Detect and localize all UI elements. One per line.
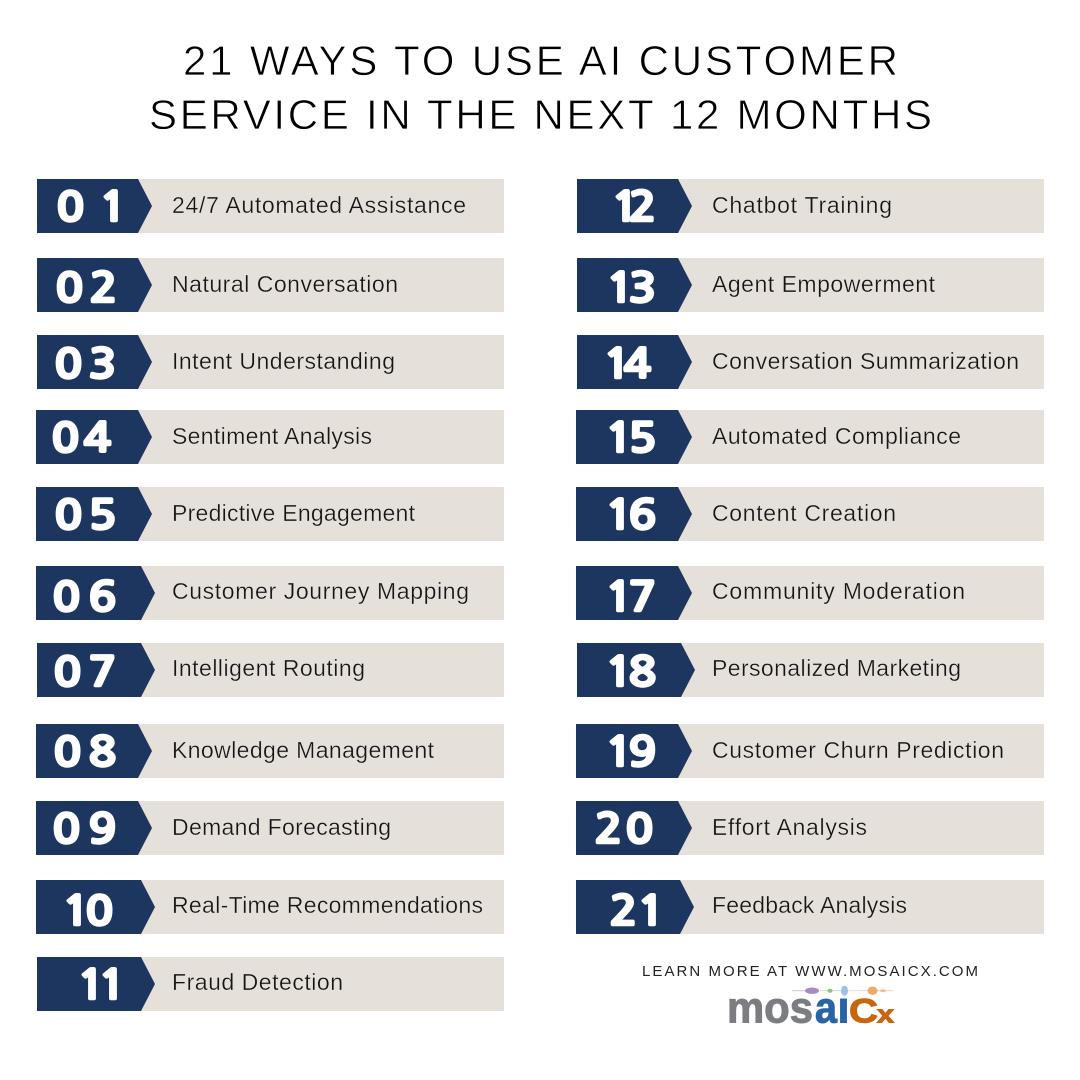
item 11: Fraud Detection xyxy=(172,969,343,995)
item 19: Customer Churn Prediction xyxy=(712,737,1004,763)
item 05: 05 xyxy=(54,497,116,535)
item 01: 01 xyxy=(56,189,127,227)
item 03 xyxy=(37,335,504,389)
item 13 xyxy=(577,258,1044,312)
item 15 xyxy=(576,410,1044,464)
item 11: 11 xyxy=(77,967,126,1005)
item 07: 07 xyxy=(54,654,116,692)
item 21 xyxy=(576,880,1044,934)
item 15: 15 xyxy=(605,420,656,458)
item 12 xyxy=(577,179,1044,233)
item 17: 17 xyxy=(605,579,656,617)
item 14: 14 xyxy=(603,346,651,384)
title: SERVICE IN THE NEXT 12 MONTHS xyxy=(149,91,932,138)
item 09 xyxy=(36,801,504,855)
logo wordmark: C xyxy=(849,992,878,1030)
item 14 xyxy=(577,335,1044,389)
item 18 xyxy=(577,643,1044,697)
icon: sound wave xyxy=(792,986,893,996)
logo: mosaicx xyxy=(727,984,895,1032)
item 08 xyxy=(36,724,504,778)
item 03: 03 xyxy=(54,346,116,384)
item 10 xyxy=(36,880,504,934)
item 05 xyxy=(36,487,504,541)
item 15: Automated Compliance xyxy=(712,423,961,449)
item 12: Chatbot Training xyxy=(712,192,892,218)
item 16: 16 xyxy=(605,497,656,535)
item 08: Knowledge Management xyxy=(172,737,435,763)
item 04 xyxy=(36,410,504,464)
item 21: Feedback Analysis xyxy=(712,892,907,918)
item 06: Customer Journey Mapping xyxy=(172,578,469,604)
call to action: LEARN MORE AT WWW.MOSAICX.COM xyxy=(642,963,978,980)
item 07 xyxy=(37,643,504,697)
item 17 xyxy=(576,566,1044,620)
item 02: Natural Conversation xyxy=(172,271,398,297)
item 20 xyxy=(576,801,1044,855)
item 01 xyxy=(37,179,504,233)
item 11 xyxy=(37,957,504,1011)
item 12: 12 xyxy=(611,189,656,227)
item 19 xyxy=(576,724,1044,778)
item 02: 02 xyxy=(56,270,117,308)
item 04: Sentiment Analysis xyxy=(172,423,372,449)
item 08: 08 xyxy=(54,734,116,772)
item 10: 10 xyxy=(62,893,113,931)
item 19: 19 xyxy=(605,734,656,772)
item 07: Intelligent Routing xyxy=(172,655,365,681)
item 10: Real-Time Recommendations xyxy=(172,892,483,918)
logo wordmark: I xyxy=(838,992,849,1030)
item 13: 13 xyxy=(606,270,656,308)
item 06: 06 xyxy=(52,579,116,617)
item 21: 21 xyxy=(610,893,665,931)
logo wordmark: x xyxy=(877,1002,895,1028)
item 02 xyxy=(37,258,504,312)
item 09: 09 xyxy=(52,811,116,849)
item 20: Effort Analysis xyxy=(712,814,867,840)
logo wordmark: a xyxy=(815,984,837,1032)
item 18: Personalized Marketing xyxy=(712,655,961,681)
item 16 xyxy=(576,487,1044,541)
item 18: 18 xyxy=(605,654,656,692)
title: 21 WAYS TO USE AI CUSTOMER xyxy=(183,37,898,84)
logo wordmark: mos xyxy=(727,984,813,1032)
item 17: Community Moderation xyxy=(712,578,965,604)
item 09: Demand Forecasting xyxy=(172,814,391,840)
title xyxy=(149,37,932,138)
logo wordmark xyxy=(727,984,895,1032)
item 20: 20 xyxy=(594,811,653,849)
item 06 xyxy=(36,566,504,620)
item 05: Predictive Engagement xyxy=(172,500,416,526)
item 01: 24/7 Automated Assistance xyxy=(172,192,466,218)
item 13: Agent Empowerment xyxy=(712,271,936,297)
item 14: Conversation Summarization xyxy=(712,348,1019,374)
item 16: Content Creation xyxy=(712,500,896,526)
item 03: Intent Understanding xyxy=(172,348,395,374)
item 04: 04 xyxy=(52,420,111,458)
